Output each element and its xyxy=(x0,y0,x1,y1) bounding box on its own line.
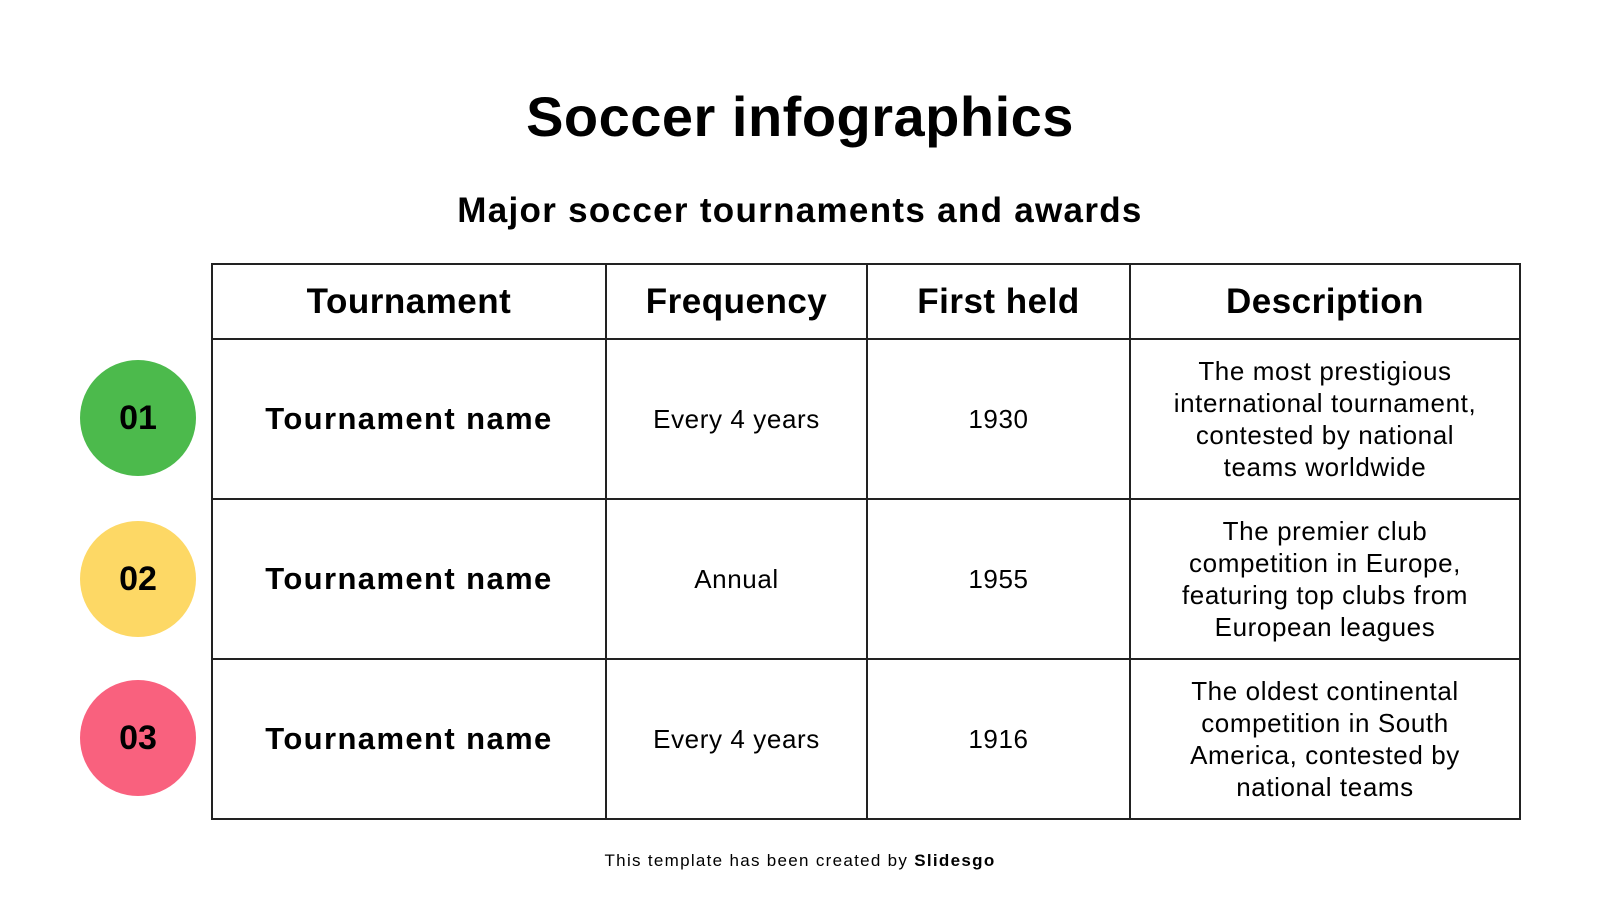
table xyxy=(211,263,1521,820)
table: The oldest continental xyxy=(1191,676,1459,706)
table: First held xyxy=(917,282,1080,320)
table: America, contested by xyxy=(1190,740,1460,770)
table: teams worldwide xyxy=(1224,452,1426,482)
table: Annual xyxy=(694,564,779,594)
table: contested by national xyxy=(1196,420,1454,450)
table: Tournament xyxy=(307,282,511,320)
table: 1916 xyxy=(968,724,1029,754)
table: international tournament, xyxy=(1174,388,1476,418)
table: competition in South xyxy=(1201,708,1449,738)
footer: This template has been created by Slidesgo xyxy=(604,851,996,870)
table: The most prestigious xyxy=(1198,356,1452,386)
table: The premier club xyxy=(1223,516,1427,546)
title: Soccer infographics xyxy=(526,85,1074,148)
table: competition in Europe, xyxy=(1189,548,1461,578)
circle 01: 01 xyxy=(119,399,157,437)
circle 02: 02 xyxy=(119,560,157,598)
table: 1930 xyxy=(968,404,1029,434)
table: national teams xyxy=(1236,772,1414,802)
circle 03: 03 xyxy=(119,719,157,757)
table: 1955 xyxy=(968,564,1029,594)
circle 01 xyxy=(80,360,196,476)
table: Tournament name xyxy=(265,561,553,596)
table: Description xyxy=(1226,282,1424,320)
table: Tournament name xyxy=(265,721,553,756)
circle 03 xyxy=(80,680,196,796)
circle 02 xyxy=(80,521,196,637)
subtitle: Major soccer tournaments and awards xyxy=(457,191,1143,230)
table: Frequency xyxy=(646,282,827,320)
table: Tournament name xyxy=(265,401,553,436)
table: featuring top clubs from xyxy=(1182,580,1468,610)
table: Every 4 years xyxy=(653,404,820,434)
table: Every 4 years xyxy=(653,724,820,754)
table: European leagues xyxy=(1215,612,1435,642)
